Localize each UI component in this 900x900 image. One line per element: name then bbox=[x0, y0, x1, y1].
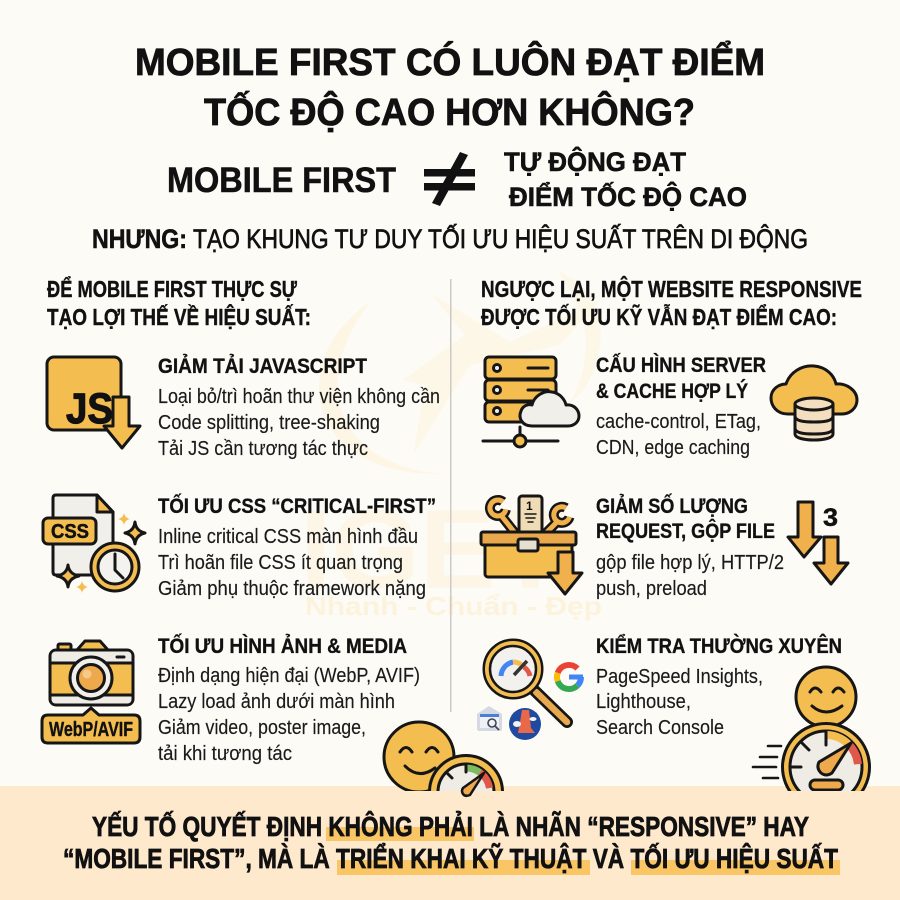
item: reduce requests: REQUEST, GỘP FILE bbox=[596, 519, 775, 543]
icon: CSS file with clock: CSS bbox=[51, 521, 89, 543]
item: optimize images bbox=[158, 634, 420, 765]
item: server and cache: & CACHE HỢP LÝ bbox=[596, 379, 748, 403]
item: optimize images: TỐI ƯU HÌNH ẢNH & MEDIA bbox=[158, 634, 407, 658]
icon: down arrows with number 3: 3 bbox=[823, 504, 838, 532]
item: reduce requests: push, preload bbox=[596, 578, 707, 600]
icon: smiley with gauge left bbox=[382, 720, 504, 791]
item: reduce requests bbox=[596, 494, 784, 600]
item: critical CSS: Giảm phụ thuộc framework nặng bbox=[158, 578, 426, 600]
item: reduce requests: GIẢM SỐ LƯỢNG bbox=[596, 494, 748, 518]
tagline: NHƯNG: bbox=[92, 224, 187, 254]
item: regular checks bbox=[596, 634, 842, 739]
icon: Lighthouse bbox=[509, 708, 541, 740]
item: reduce JavaScript: Code splitting, tree-shaking bbox=[158, 412, 380, 434]
item: critical CSS: Inline critical CSS màn hình đầu bbox=[158, 526, 418, 548]
left column heading: TẠO LỢI THẾ VỀ HIỆU SUẤT: bbox=[47, 303, 311, 330]
tagline: TẠO KHUNG TƯ DUY TỐI ƯU HIỆU SUẤT TRÊN DI ĐỘNG bbox=[193, 222, 808, 254]
icon: toolbox with wrenches bbox=[481, 496, 582, 594]
title: MOBILE FIRST CÓ LUÔN ĐẠT ĐIỂM bbox=[135, 39, 765, 84]
icon: gauge needle left bbox=[462, 773, 484, 796]
icon: Google logo bbox=[557, 665, 583, 689]
footer band bbox=[0, 786, 900, 900]
icon: camera with WebP/AVIF tag: WebP/AVIF bbox=[49, 719, 133, 741]
item: reduce JavaScript bbox=[158, 355, 440, 460]
item: server and cache bbox=[596, 354, 766, 459]
item: optimize images: Giảm video, poster image, bbox=[158, 717, 366, 739]
item: optimize images: tải khi tương tác bbox=[158, 743, 292, 765]
watermark logo: IGET bbox=[300, 487, 565, 612]
divider bbox=[450, 279, 452, 712]
item: reduce JavaScript: Tải JS cần tương tác thực bbox=[158, 438, 368, 460]
item: critical CSS: TỐI ƯU CSS “CRITICAL-FIRST” bbox=[158, 494, 436, 518]
icon: not equal sign bbox=[424, 152, 475, 206]
title: TỐC ĐỘ CAO HƠN KHÔNG? bbox=[204, 89, 695, 134]
subtitle equation bbox=[167, 146, 747, 212]
icon: down arrows with number 3 bbox=[788, 502, 848, 584]
item: optimize images: Lazy load ảnh dưới màn hình bbox=[158, 691, 395, 713]
item: reduce requests: gộp file hợp lý, HTTP/2 bbox=[596, 552, 784, 574]
icon: Search Console bbox=[477, 706, 502, 731]
icon: toolbox with wrenches: 1 bbox=[526, 499, 533, 513]
item: critical CSS bbox=[158, 494, 436, 600]
footer highlights bbox=[326, 827, 840, 875]
icon: server rack with cloud bbox=[483, 357, 579, 447]
icon: smiley with speedometer right bbox=[782, 667, 870, 810]
item: regular checks: PageSpeed Insights, bbox=[596, 666, 763, 688]
icon: magnifier with speed gauge bbox=[484, 640, 567, 722]
footer conclusion text bbox=[63, 810, 838, 874]
subtitle equation: MOBILE FIRST bbox=[167, 161, 396, 200]
item: server and cache: CDN, edge caching bbox=[596, 437, 750, 459]
right column heading bbox=[481, 275, 862, 330]
left column heading bbox=[47, 275, 311, 330]
item: reduce JavaScript: GIẢM TẢI JAVASCRIPT bbox=[158, 355, 367, 378]
icon: JS file with down arrow bbox=[47, 357, 140, 448]
item: regular checks: Search Console bbox=[596, 717, 724, 739]
subtitle equation: TỰ ĐỘNG ĐẠT bbox=[504, 146, 686, 177]
item: optimize images: Định dạng hiện đại (WebP, AVIF) bbox=[158, 665, 420, 687]
watermark logo: Nhanh - Chuẩn - Đẹp bbox=[305, 591, 602, 621]
item: regular checks: KIỂM TRA THƯỜNG XUYÊN bbox=[596, 634, 842, 658]
left column heading: ĐỂ MOBILE FIRST THỰC SỰ bbox=[47, 275, 298, 302]
item: regular checks: Lighthouse, bbox=[596, 691, 691, 713]
subtitle equation: ĐIỂM TỐC ĐỘ CAO bbox=[509, 180, 747, 212]
icon: CSS file with clock bbox=[43, 495, 145, 593]
icon: JS file with down arrow: JS bbox=[66, 385, 113, 433]
item: critical CSS: Trì hoãn file CSS ít quan trọng bbox=[158, 552, 403, 574]
icon: camera with WebP/AVIF tag bbox=[42, 641, 140, 743]
item: server and cache: cache-control, ETag, bbox=[596, 411, 761, 433]
item: server and cache: CẤU HÌNH SERVER bbox=[596, 354, 766, 377]
title bbox=[135, 39, 765, 134]
icon: cloud database bbox=[771, 366, 857, 440]
icon: speed lines bbox=[753, 746, 781, 778]
item: reduce JavaScript: Loại bỏ/trì hoãn thư viện không cần bbox=[158, 386, 440, 408]
watermark logo bbox=[300, 270, 602, 621]
